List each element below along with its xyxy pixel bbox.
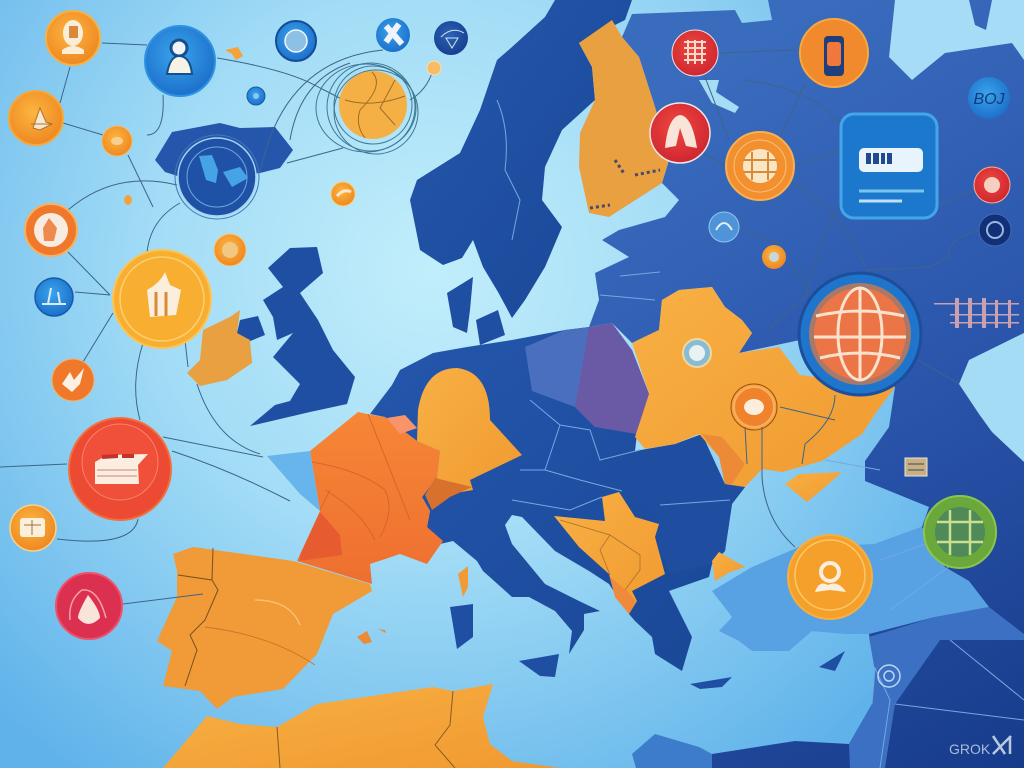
- map: Iceland: [155, 123, 293, 180]
- icon: blue BOJ badge: BOJ: [973, 91, 1006, 108]
- national border lines: [497, 100, 1024, 768]
- icon: small orange flecks: [124, 47, 243, 205]
- icon: top blue badges: [247, 18, 468, 105]
- map: Crimea: [785, 472, 842, 502]
- icon: blue chart badge: [35, 278, 73, 316]
- icon: red drop badge: [56, 573, 122, 639]
- icon: orange globe with rings: [316, 63, 418, 154]
- map: Northern Ireland: [237, 316, 265, 342]
- map: islands: [357, 566, 845, 689]
- icon: small east badges: [683, 212, 1011, 430]
- map: Balkans: [554, 492, 665, 614]
- small Levant emblem: [878, 665, 900, 687]
- map: Romania: [622, 434, 745, 574]
- map: Ireland: [187, 310, 252, 386]
- map: Poland and Baltics: [525, 323, 649, 434]
- icon: orange person badge south: [788, 535, 872, 619]
- map: Turkey: [712, 527, 989, 651]
- map: Denmark: [447, 277, 505, 345]
- icon: orange left badges: [9, 61, 441, 551]
- icon: small document: [905, 458, 927, 476]
- map: Russia and eastern landmass: [589, 0, 1024, 768]
- icon: large orange box badge: [113, 250, 211, 348]
- icon: green globe badge: [924, 496, 996, 568]
- icon: top right red badge: [672, 30, 718, 76]
- icon: orange device badge: [800, 19, 868, 87]
- map: France: [297, 412, 472, 584]
- map: Norway and Sweden: [410, 0, 632, 318]
- icon: red arch badge: [650, 103, 710, 163]
- map: Africa: [163, 684, 560, 768]
- icon: dark globe over Iceland: [175, 135, 259, 219]
- map: Germany: [417, 368, 522, 497]
- map: Finland: [579, 20, 669, 217]
- icon: orange ring badge: [726, 132, 794, 200]
- map: Great Britain: [250, 247, 355, 426]
- connection lines: [0, 43, 979, 604]
- watermark: GROK: GROK: [949, 741, 991, 757]
- icon: large globe badge: [799, 273, 921, 395]
- map: Atlantic coast highlight: [267, 451, 320, 511]
- icon: blue person badge: [145, 26, 215, 96]
- icon: large red badge: [69, 418, 171, 520]
- icon: red small badge: [974, 167, 1010, 203]
- map: Spain and Portugal: [157, 547, 372, 709]
- icon: orange person badge: [46, 11, 100, 65]
- icon: blue BOJ badge: [968, 77, 1010, 119]
- map: Belarus and Ukraine: [632, 287, 895, 487]
- map: central Europe, Italy, Romania and Greece: [370, 327, 745, 671]
- watermark: GROK: [949, 736, 1011, 757]
- panel: blue card: [841, 114, 937, 218]
- chart: small bars east: [934, 298, 1019, 328]
- map: European Turkey: [712, 552, 745, 581]
